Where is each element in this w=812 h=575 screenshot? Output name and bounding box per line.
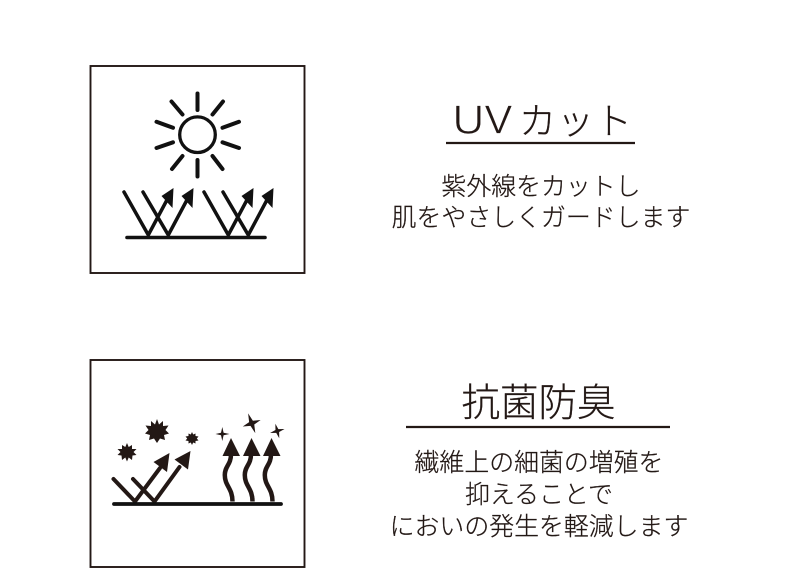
text block: antibacterial description: においの発生を軽減します [390,513,688,541]
icon: deflected arrows [114,451,190,502]
heading: UV cut: カット [519,101,633,142]
icon: sun [156,94,239,176]
text block: antibacterial description: 繊維上の細菌の増殖を [415,449,663,477]
icon: reflected UV rays [124,188,274,238]
text block: UV cut description: 紫外線をカットし [441,173,641,201]
heading: antibacterial deodorant: 抗菌防臭 [461,382,616,425]
icon: germs [118,419,198,462]
panel: antibacterial deodorant icon [90,360,304,567]
text block: UV cut description: 肌をやさしくガードします [392,204,690,232]
heading: UV cut [446,90,635,144]
icon: rising wavy arrows [114,438,281,504]
panel: UV cut icon [90,66,304,273]
text block: antibacterial description [390,449,688,541]
heading: UV cut: UV [452,90,512,144]
text block: antibacterial description: 抑えることで [465,481,613,509]
text block: UV cut description [392,173,690,232]
icon: sparkles [216,410,286,441]
